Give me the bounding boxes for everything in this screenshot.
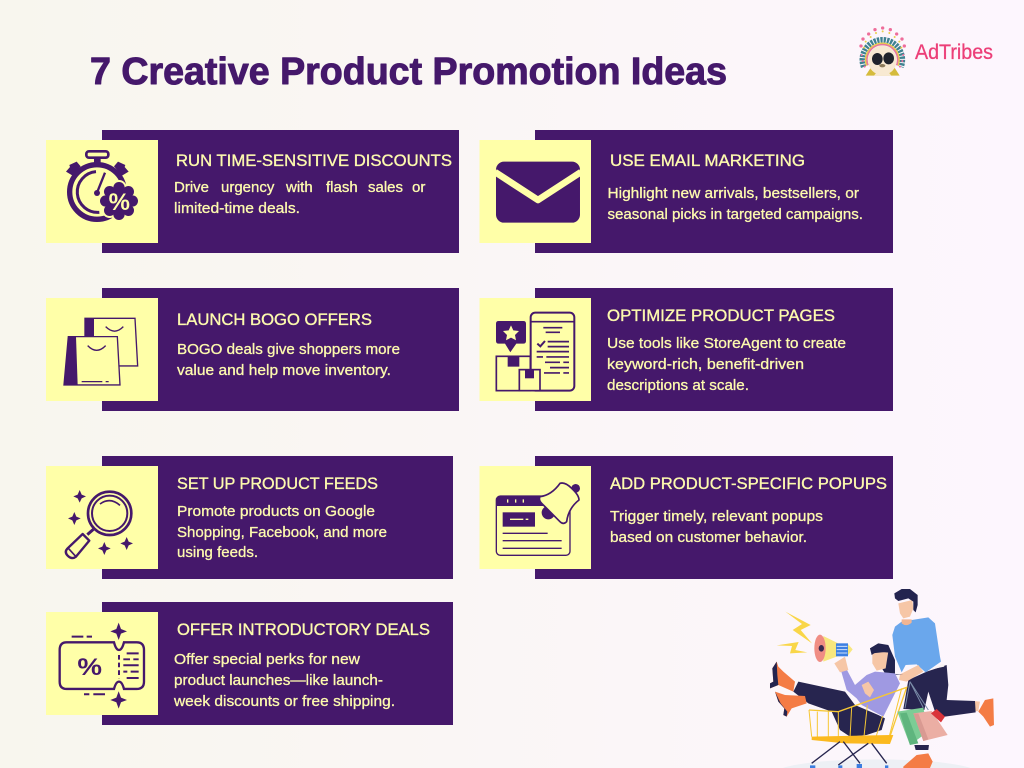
icon: stopwatch with percent: % [109,189,130,216]
description: sales [368,179,403,196]
description: Drive [174,179,209,196]
description: Shopping, Facebook, and more [177,524,387,541]
heading: RUN TIME-SENSITIVE DISCOUNTS [176,151,452,170]
illustration: couple with shopping cart and megaphone [770,589,994,768]
heading: LAUNCH BOGO OFFERS [177,310,372,329]
description: or [412,179,425,196]
heading: OPTIMIZE PRODUCT PAGES [607,306,835,325]
description: using feeds. [177,544,258,561]
icon: stopwatch with percent [66,151,138,220]
heading: SET UP PRODUCT FEEDS [177,474,378,493]
description: product launches—like launch- [174,672,383,689]
icon: product page with boxes [496,313,574,391]
woman [770,643,903,737]
icon: discount ticket: % [77,654,102,681]
man [892,589,994,768]
description [173,651,395,710]
panel: offer introductory deals [46,602,453,725]
description: Promote products on Google [177,503,375,520]
description: value and help move inventory. [177,362,391,379]
description [610,508,823,546]
megaphone [814,635,853,662]
description: BOGO deals give shoppers more [177,341,400,358]
description [174,179,425,217]
description: urgency [221,179,275,196]
description: Offer special perks for new [174,651,360,668]
description: with [285,179,313,196]
panel: optimize product pages [480,288,893,411]
icon: magnifier with sparkles [66,490,133,558]
description [608,185,863,223]
heading: USE EMAIL MARKETING [610,151,805,170]
panel: launch bogo offers [46,288,459,411]
description: flash [326,179,358,196]
description [177,341,400,379]
icon: browser window with bell [496,483,580,555]
icon: panda with headdress [859,26,906,76]
description: keyword-rich, benefit-driven [607,356,804,373]
panel: run time-sensitive discounts [46,130,459,253]
description: descriptions at scale. [607,377,749,394]
description [607,335,846,394]
lightning bolts [777,612,812,653]
description: seasonal picks in targeted campaigns. [608,206,863,223]
logo: AdTribes [859,26,993,76]
logo wordmark: AdTribes [915,41,993,64]
panel: use email marketing [480,130,893,253]
description: based on customer behavior. [610,529,807,546]
description: Use tools like StoreAgent to create [607,335,846,352]
icon: envelope [495,162,581,223]
description [177,503,387,561]
title: 7 Creative Product Promotion Ideas [90,51,727,93]
heading: OFFER INTRODUCTORY DEALS [177,620,430,639]
shopping cart [809,687,907,768]
panel: set up product feeds [46,456,453,579]
icon: discount ticket [60,623,144,709]
heading: ADD PRODUCT-SPECIFIC POPUPS [610,474,887,493]
description: limited-time deals. [174,200,300,217]
description: Highlight new arrivals, bestsellers, or [608,185,859,202]
panel: add product-specific popups [480,456,893,579]
description: week discounts or free shipping. [173,693,395,710]
shopping bags [897,682,948,745]
description: Trigger timely, relevant popups [610,508,823,525]
icon: shopping bags [64,318,138,385]
